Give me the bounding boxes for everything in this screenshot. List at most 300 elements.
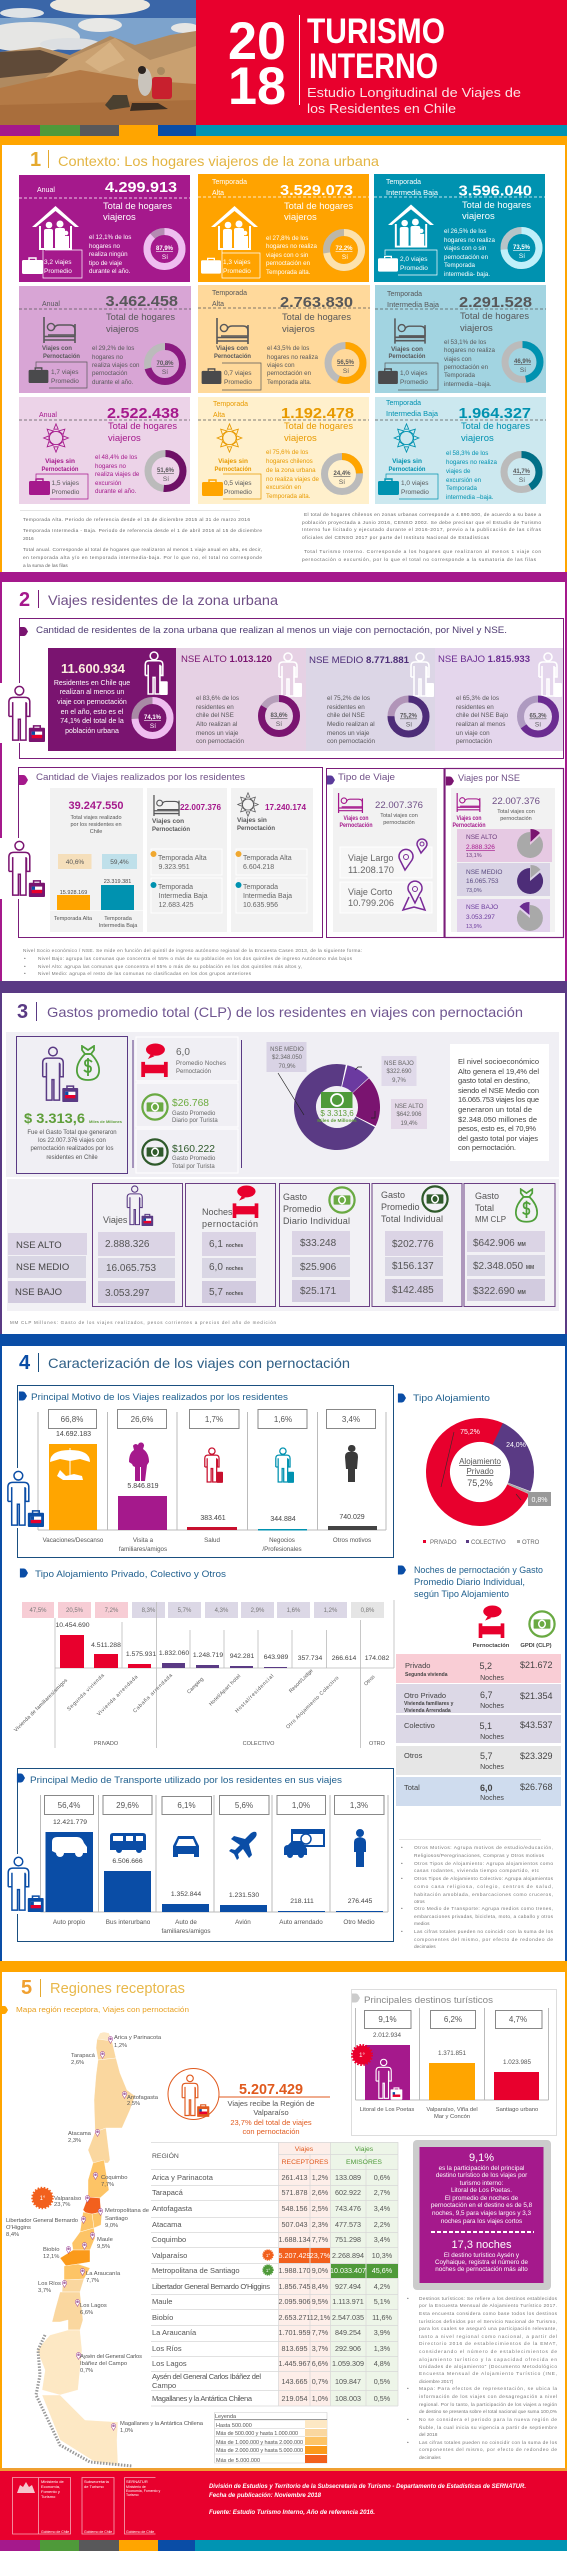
panel: tipo de viaje [326, 768, 444, 938]
total viajes [68, 800, 124, 835]
notes NSE: • [24, 957, 26, 962]
subtitle [307, 85, 521, 116]
callout: NSE: del gasto total por viajes [458, 1134, 538, 1143]
card: alta con pernoctacion: Total de hogares [282, 312, 351, 323]
region names: Valparaíso [152, 2251, 187, 2260]
card: NSE medio: NSE MEDIO 8.771.881 [309, 655, 410, 666]
map legend: Más de 500.000 y hasta 1.000.000 [216, 2431, 298, 2437]
rotated category labels: Hotel/Apart hotel [208, 1673, 242, 1707]
notes section 4: • [401, 1907, 403, 1912]
panel: gasto total [16, 1036, 128, 1174]
region labels: Magallanes y la Antártica Chilena [120, 2421, 204, 2427]
bar: valparaiso: 1.371.851 [438, 2050, 467, 2057]
card: anual total: tipo de viaje [89, 260, 123, 267]
panel: cantidad de residentes: Cantidad de residentes de la zona urbana que realizan al menos un viaje con pernoctación, por Nivel y NSE. [36, 625, 507, 636]
card: alta sin pernoctacion: Temporada [213, 401, 248, 408]
card: intermedia sin pernoctacion: Promedio [401, 489, 429, 496]
card: alta sin pernoctacion: 1.192.478 [281, 405, 354, 422]
column: gasto total: $2.348.050 MM [473, 1261, 534, 1272]
card: anual sin pernoctacion: 51,6% [157, 468, 175, 474]
region names: La Araucanía [152, 2328, 197, 2337]
region labels: 7,7% [101, 2182, 114, 2188]
bar: otros motivos [326, 1410, 377, 1544]
row otros: 5,7 [480, 1751, 493, 1761]
map legend: Más de 1.000.000 y hasta 2.000.000 [216, 2440, 303, 2446]
bar: negocios: /Profesionales [262, 1546, 302, 1553]
bar: litoral de los poetas: 2.012.934 [373, 2032, 402, 2039]
label NSE alto: 19,4% [400, 1121, 418, 1127]
card: alta sin pernoctacion: excursión en [266, 484, 302, 491]
notes section 5: por la Encuesta Mensual de Alojamiento Turístico 2017. [419, 2303, 557, 2309]
receptor values: 507.043 [282, 2220, 307, 2229]
card: intermedia con pernoctacion [375, 285, 546, 393]
card: alta sin pernoctacion: de la zona urbana [266, 467, 316, 474]
card: anual total: el 12,1% de los [89, 234, 131, 241]
callout: litoral de los poetas: El destino turístico Aysén y [444, 2252, 520, 2259]
legend tipo alojamiento [423, 1540, 540, 1546]
con pernoctacion [152, 795, 221, 833]
column: viajes: 3.053.297 [105, 1288, 150, 1299]
NSE medio: 16.065.753 [466, 878, 499, 885]
sin pernoctacion por temporada: Intermedia Baja [243, 893, 292, 900]
con pernoctacion: Pernoctación [152, 826, 190, 833]
panel: gasto total: residentes en Chile [46, 1155, 98, 1161]
notes section 5: de destino se presenta sobre el total nacional que suma 100,0% [419, 2409, 558, 2415]
bar: otro medio [334, 1796, 384, 1926]
notes NSE: • [24, 965, 26, 970]
card: NSE medio: 75,2% [400, 714, 418, 720]
bar: visita familiares: 5.846.819 [127, 1483, 159, 1490]
card: alta con pernoctacion [198, 285, 370, 393]
bar: auto arrendado: 218.111 [290, 1898, 314, 1905]
region names: Los Lagos [152, 2359, 187, 2368]
bar chart: temporada: Temporada [104, 916, 133, 922]
notes section 5: del 2018 [419, 2432, 438, 2438]
sin pernoctacion: Pernoctación [237, 825, 275, 832]
table: regiones: 7,7% [312, 2328, 329, 2337]
percent boxes: 47,5% [29, 1608, 47, 1614]
bar: valparaiso: 6,2% [444, 2015, 462, 2024]
NSE medio [457, 863, 550, 896]
card: anual total: realiza ningún [89, 251, 128, 258]
bar: auto propio: Auto propio [53, 1919, 86, 1926]
column: noches: 5,7 noches [209, 1287, 243, 1298]
footer text [209, 2483, 526, 2516]
logo: ministerio: Fomento y [41, 2489, 60, 2494]
panel: viajes por NSE [445, 768, 564, 938]
table: regiones: 3,4% [374, 2204, 391, 2213]
table: regiones: 8,4% [312, 2282, 329, 2291]
bar: otro medio: 276.445 [348, 1898, 372, 1905]
bar: visita familiares [118, 1410, 167, 1553]
callout: NSE: Alto genera el 19,4% del [458, 1067, 539, 1076]
card: intermedia con pernoctacion: viajeros [460, 323, 493, 334]
notes section 1 left: a la suma de las filas [23, 563, 68, 569]
emisor values: 109.847 [335, 2377, 361, 2386]
notes section 4: decimales [414, 1944, 436, 1950]
region labels [6, 2035, 204, 2434]
table: regiones: 6,6% [312, 2359, 329, 2368]
rotated category labels: Resort/Lodge [288, 1668, 315, 1694]
notes section 4: casas rodantes, vivienda tiempo compartido, etc [414, 1868, 540, 1874]
card: temporada intermedia baja total: viajes con o sin [444, 245, 487, 252]
bar: salud: 383.461 [200, 1515, 226, 1522]
notes section 5: regional. Por lo tanto, la participación de los viajes a región [419, 2402, 557, 2408]
bar: litoral de los poetas: 1° [359, 2053, 365, 2059]
card: intermedia con pernoctacion: el 53,1% de los [444, 339, 486, 346]
callout: litoral de los poetas [413, 2140, 551, 2290]
total viajes: por los residentes en [70, 822, 122, 828]
row labels: NSE BAJO [15, 1287, 62, 1298]
card: NSE bajo: residentes en [456, 704, 494, 711]
NSE medio: 73,0% [466, 888, 482, 894]
card: alta con pernoctacion: 2.763.830 [280, 294, 353, 311]
logo: ministerio: Ministerio de [41, 2479, 64, 2484]
bar values: 10.454.690 [55, 1622, 90, 1629]
card: promedio noches: Pernoctación [176, 1069, 211, 1075]
sin pernoctacion por temporada [236, 849, 307, 913]
section 4: caracterizacion [0, 1334, 567, 1961]
total viajes: Chile [90, 829, 102, 835]
row total [396, 1777, 561, 1806]
bar values: 942.281 [230, 1653, 254, 1660]
bar: avion: 1.231.530 [229, 1892, 259, 1899]
receptor values [279, 2173, 310, 2403]
card: alta con pernoctacion: Temporada alta. [267, 379, 312, 386]
panel: cantidad de viajes [18, 768, 322, 938]
card: intermedia sin pernoctacion: el 58,3% de los [446, 450, 488, 457]
bar: avion: 5,6% [235, 1801, 253, 1810]
card: intermedia con pernoctacion: pernoctación en [444, 364, 489, 371]
panel: tipo alojamiento donut: 75,2% [460, 1429, 480, 1436]
card: anual sin pernoctacion: Sí [163, 476, 169, 483]
note section 3: MM CLP Millones: Gasto de los viajes realizados, pesos corrientes a precios del año de medición [10, 1320, 276, 1325]
region labels: Ibáñez del Campo [80, 2361, 127, 2367]
notes section 4: habitación amoblada, embarcaciones como cruceros, [414, 1892, 553, 1898]
viaje largo: 11.208.170 [348, 865, 394, 875]
row total: Noches [480, 1795, 504, 1802]
panel: tipo de viaje: Tipo de Viaje [338, 772, 395, 783]
emisor values: 927.494 [335, 2282, 361, 2291]
receptor values: 1.688.134 [279, 2235, 310, 2244]
bar: visita familiares: familiares/amigos [119, 1546, 167, 1553]
card: anual total [19, 175, 190, 282]
table: regiones: 1,3% [374, 2344, 391, 2353]
card: alta sin pernoctacion: 24,4% [333, 471, 351, 477]
callout: litoral de los poetas: turismo interno: [460, 2180, 503, 2187]
column: gasto diario: $25.906 [300, 1262, 337, 1273]
card: temporada intermedia baja total: hogares no realiza [444, 237, 495, 244]
notes section 4: embarcaciones privadas, bicicleta, moto, a caballo y otros [414, 1914, 554, 1920]
map of Chile [6, 2032, 204, 2466]
region labels: 1,0% [120, 2428, 133, 2434]
heading 2 [19, 589, 278, 611]
heading 5 [21, 1977, 185, 1999]
card: gasto diario [136, 1083, 238, 1127]
table: regiones: 4,8% [374, 2359, 391, 2368]
notes section 4: • [401, 1846, 403, 1851]
panel: gasto total: Miles de Millones [89, 1119, 123, 1124]
category groups [94, 1741, 386, 1747]
notes section 4: Otros Tipos de Alojamiento Colectivo: Agrupa alojamientos [414, 1876, 554, 1882]
emisor values: 849.254 [335, 2328, 361, 2337]
card: NSE medio: Sí [406, 722, 412, 728]
seals: 1° [266, 2253, 270, 2258]
region names: Metropolitana de Santiago [152, 2266, 240, 2275]
column: gasto diario: Promedio [283, 1204, 322, 1214]
card: NSE bajo: un viaje con [456, 730, 490, 737]
notes section 5: alojamiento turístico y la capacidad ofrecida en [419, 2357, 557, 2363]
row otro privado: 6,7 [480, 1690, 493, 1700]
card: anual con pernoctacion: el 29,2% de los [92, 345, 134, 352]
region names: Coquimbo [152, 2235, 186, 2244]
bar: auto propio [44, 1796, 94, 1926]
panel: tipo de viaje: pernoctación [383, 820, 415, 826]
card: intermedia sin pernoctacion: viajeros [461, 433, 494, 444]
region names: Biobío [152, 2313, 173, 2322]
notes section 4: Otro Medio de Transporte: Agrupa medios como trenes, [414, 1906, 553, 1912]
card: alta sin pernoctacion: Alta [213, 412, 225, 419]
receptor values: 5.207.429 [279, 2251, 310, 2260]
card: temporada intermedia baja total: 3.596.040 [458, 182, 532, 200]
card: temporada intermedia baja total: viajeros [462, 211, 495, 222]
card: anual total: Sí [162, 254, 168, 261]
panel: gasto total: los 22.007.376 viajes con [38, 1138, 106, 1144]
panel: noches y gasto por alojamiento: Noches de pernoctación y Gasto [414, 1565, 543, 1576]
table: regiones: 3,9% [374, 2328, 391, 2337]
callout: litoral de los poetas: noches, 9,5 para viajes largos y 3,3 [432, 2210, 532, 2217]
percent boxes: 2,9% [251, 1608, 265, 1614]
bar: santiago urbano: Santiago urbano [496, 2107, 538, 2113]
card: intermedia con pernoctacion: Intermedia Baja [387, 302, 439, 309]
panel: tipo alojamiento donut: Privado [466, 1467, 494, 1476]
chart: donut gasto por NSE: $ 3.313,6 [320, 1109, 354, 1118]
total viajes: Total viajes realizado [70, 815, 122, 821]
sin pernoctacion por temporada: Temporada [243, 884, 278, 891]
card: intermedia con pernoctacion: Viajes con [391, 346, 423, 353]
panel: medio de transporte: Principal Medio de Transporte utilizado por los residentes en sus viajes [30, 1775, 342, 1786]
card: NSE bajo: realizan al menos [456, 721, 505, 728]
card: temporada alta total: viajes con o sin [266, 252, 309, 259]
bar: bus interurbano: 6.506.666 [112, 1858, 143, 1865]
card: anual con pernoctacion: Pernoctación [43, 353, 80, 360]
column: noches [186, 1184, 276, 1306]
card: anual con pernoctacion: durante el año. [92, 379, 134, 386]
region names: Tarapacá [152, 2188, 184, 2197]
notes section 1 left [23, 517, 262, 569]
category groups: PRIVADO [94, 1741, 119, 1747]
callout: NSE: gasto total en destino, [458, 1076, 530, 1085]
region labels: Libertador General Bernardo [6, 2218, 78, 2224]
row total: 6,0 [480, 1783, 493, 1793]
column: gasto diario: $25.171 [300, 1286, 337, 1297]
bar values: 174.082 [365, 1655, 389, 1662]
percent boxes: 4,3% [215, 1608, 229, 1614]
card: anual sin pernoctacion: viajeros [108, 433, 141, 444]
bar: valparaiso: Mar y Concón [434, 2114, 470, 2120]
legend tipo alojamiento: PRIVADO [430, 1540, 457, 1546]
panel: motivo: Principal Motivo de los Viajes realizados por los residentes [31, 1392, 288, 1403]
row labels [8, 1233, 87, 1303]
card: NSE alto: NSE ALTO 1.013.120 [181, 654, 272, 665]
emisor values: 1.059.309 [332, 2359, 364, 2368]
bar: vacaciones: Vacaciones/Descanso [43, 1537, 104, 1544]
bar: otros motivos: 3,4% [342, 1415, 360, 1424]
bar: visita familiares: Visita a [133, 1537, 154, 1544]
card: alta con pernoctacion: Sí [343, 368, 349, 375]
region labels: 12,1% [43, 2254, 59, 2260]
row colectivo: Colectivo [404, 1721, 435, 1730]
icon: traveller with suitcase [0, 683, 45, 743]
con pernoctacion por temporada: Temporada [158, 884, 193, 891]
card: anual sin pernoctacion: 2.522.438 [107, 405, 179, 422]
map legend: Más de 2.000.000 y hasta 5.000.000 [216, 2448, 303, 2454]
percent boxes: 8,3% [142, 1608, 156, 1614]
bar values: 1.832.060 [159, 1650, 189, 1657]
header photo: desert mountains with two travellers [0, 0, 199, 125]
card: anual total: viajeros [103, 212, 136, 223]
region labels: Aysén del General Carlos [80, 2354, 142, 2360]
bar: negocios: 1,6% [274, 1415, 292, 1424]
card: gasto total por turista: Gasto Promedio [172, 1156, 216, 1162]
bar values: 266.614 [332, 1655, 356, 1662]
card: NSE alto: el 83,6% de los [196, 695, 239, 702]
card: anual total: hogares no [89, 243, 121, 250]
footer color stripe [0, 2540, 567, 2551]
notes section 5: diciembre 2017) [419, 2379, 454, 2385]
rotated category labels: Otro Alojamiento Colectivo [285, 1675, 340, 1730]
con pernoctacion por temporada: Intermedia Baja [158, 893, 208, 900]
panel: viajes por NSE: Viajes por NSE [458, 773, 520, 784]
column: gasto diario: Gasto [283, 1192, 307, 1202]
notes NSE: Nivel Socio económico / NSE. Se mide en función del quintil de ingreso autónomo regional de la Encuesta Casen 2013, de la siguiente forma: [23, 948, 362, 954]
column: gasto total individual: $202.776 [392, 1239, 434, 1250]
highlighted cells [279, 2248, 398, 2278]
receptor values: 219.054 [282, 2394, 307, 2403]
footer text: Fecha de publicación: Noviembre 2018 [209, 2492, 321, 2499]
card: temporada alta total: Temporada alta. [266, 269, 311, 276]
notes NSE: Nivel Medio: agrupa el resto de las comunas no clasificadas en los dos grupos anteriores [38, 971, 252, 977]
table: regiones: 0,5% [374, 2377, 391, 2386]
bar values: 1.575.931 [126, 1651, 156, 1658]
percent boxes: 20,5% [66, 1608, 84, 1614]
bar: salud [187, 1410, 239, 1544]
table: regiones: 1,2% [312, 2173, 329, 2182]
notes section 4: componentes del mismo, por efecto de redondeo de [414, 1937, 553, 1943]
notes section 5: componentes del mismo, por efecto de redondeo de [419, 2447, 557, 2453]
map heading: Mapa región receptora, Viajes con pernoctación [16, 2005, 189, 2014]
card: intermedia sin pernoctacion: 1.964.327 [458, 405, 531, 422]
bar: negocios [258, 1410, 307, 1553]
notes NSE: Nivel Alto: agrupa las comunas que concentra el 55% o más de su población en los dos quintiles más altos y, [38, 964, 302, 970]
map legend: Hasta 500.000 [216, 2423, 252, 2429]
region names: Los Ríos [152, 2344, 182, 2353]
sin pernoctacion: 17.240.174 [265, 802, 306, 812]
heading 4 [19, 1352, 350, 1374]
card: anual sin pernoctacion: realiza viajes de [95, 471, 140, 478]
row total: $26.768 [520, 1782, 553, 1792]
bar: salud: 1,7% [205, 1415, 223, 1424]
notes section 1 right: población proyectada a Junio 2016, CENSO 2002. Se debe precisar que el Estudio de Turismo [302, 520, 541, 526]
region labels: 3,7% [38, 2288, 51, 2294]
notes section 1 right [302, 512, 542, 563]
card: intermedia sin pernoctacion: Viajes sin [392, 458, 422, 465]
card: promedio noches [136, 1037, 238, 1081]
region labels: Coquimbo [101, 2175, 127, 2181]
bar: auto de familiares: Auto de [175, 1919, 197, 1926]
receptor values: 2.653.271 [279, 2313, 310, 2322]
notes section 1 right: pernoctación o excursión, por lo que el total no corresponde a la sumatoria de las filas [302, 557, 537, 563]
bar: auto de familiares: 1.352.844 [171, 1891, 201, 1898]
label NSE alto: NSE ALTO [395, 1104, 424, 1110]
row otros: Otros [404, 1751, 423, 1760]
callout: valparaiso: 23,7% del total de viajes [230, 2118, 312, 2127]
card: anual sin pernoctacion: Anual [39, 412, 57, 419]
category groups: OTRO [369, 1741, 386, 1747]
panel: noches y gasto por alojamiento: GPDI (CLP) [520, 1643, 552, 1649]
table: regiones: 3,7% [312, 2344, 329, 2353]
card: anual total: durante el año. [89, 268, 131, 275]
panel: principales destinos [352, 1990, 556, 2136]
legend tipo alojamiento: OTRO [522, 1540, 540, 1546]
notes section 5: Mapa: Para efectos de representación, se ubica la [419, 2386, 557, 2392]
label NSE bajo: $322.690 [386, 1069, 412, 1075]
table: regiones: 23,7% [310, 2251, 331, 2260]
percent boxes: 1,2% [324, 1608, 338, 1614]
card: promedio noches: 6,0 [176, 1047, 190, 1058]
card: NSE bajo [435, 648, 563, 751]
emisor values: 2.268.894 [332, 2251, 364, 2260]
card: anual con pernoctacion: 3.462.458 [106, 293, 178, 310]
map legend [214, 2412, 327, 2464]
receptor values: 2.095.906 [279, 2297, 310, 2306]
title: year [228, 12, 286, 116]
panel: tipo alojamiento donut: Alojamiento [459, 1457, 501, 1466]
row privado [396, 1654, 561, 1683]
card: intermedia sin pernoctacion: Temporada [446, 485, 478, 492]
column: noches: pernoctación [202, 1219, 258, 1229]
category groups: COLECTIVO [243, 1741, 275, 1747]
card: gasto total por turista: Total por Turista [172, 1164, 215, 1170]
row otro privado: Otro Privado [404, 1691, 446, 1700]
column: noches: 6,0 noches [209, 1262, 243, 1273]
bar: auto de familiares [162, 1796, 212, 1935]
row otro privado: $21.354 [520, 1691, 553, 1701]
rotated category labels: Vivienda de familiares/amigos [13, 1677, 69, 1733]
card: anual total: 87,9% [156, 246, 174, 252]
card: gasto total por turista [136, 1129, 238, 1173]
callout: litoral de los poetas: es la participación del principal [439, 2165, 524, 2172]
card: gasto total por turista: $160.222 [172, 1144, 215, 1155]
con pernoctacion por temporada: 12.683.425 [158, 902, 194, 909]
receptor values: 1.988.170 [279, 2266, 310, 2275]
bar: auto arrendado: 1,0% [292, 1801, 310, 1810]
card: anual sin pernoctacion: Viajes sin [45, 458, 75, 465]
con pernoctacion por temporada [150, 849, 222, 913]
card: intermedia sin pernoctacion: Temporada [386, 400, 421, 407]
region names: Magallanes y la Antártica Chilena [152, 2394, 253, 2403]
card: NSE medio [306, 648, 435, 751]
card: NSE alto: Alto realizan al [196, 721, 237, 728]
logo: subsecretaria: de Turismo [84, 2484, 105, 2489]
rotated category labels: Segunda vivienda [66, 1673, 106, 1712]
rotated category labels [13, 1668, 377, 1733]
sin pernoctacion [237, 793, 306, 832]
column: noches: Noches [202, 1207, 233, 1217]
table: regiones [151, 2142, 398, 2406]
NSE alto: 2.888.326 [466, 844, 495, 851]
card: anual total: Promedio [44, 268, 72, 275]
